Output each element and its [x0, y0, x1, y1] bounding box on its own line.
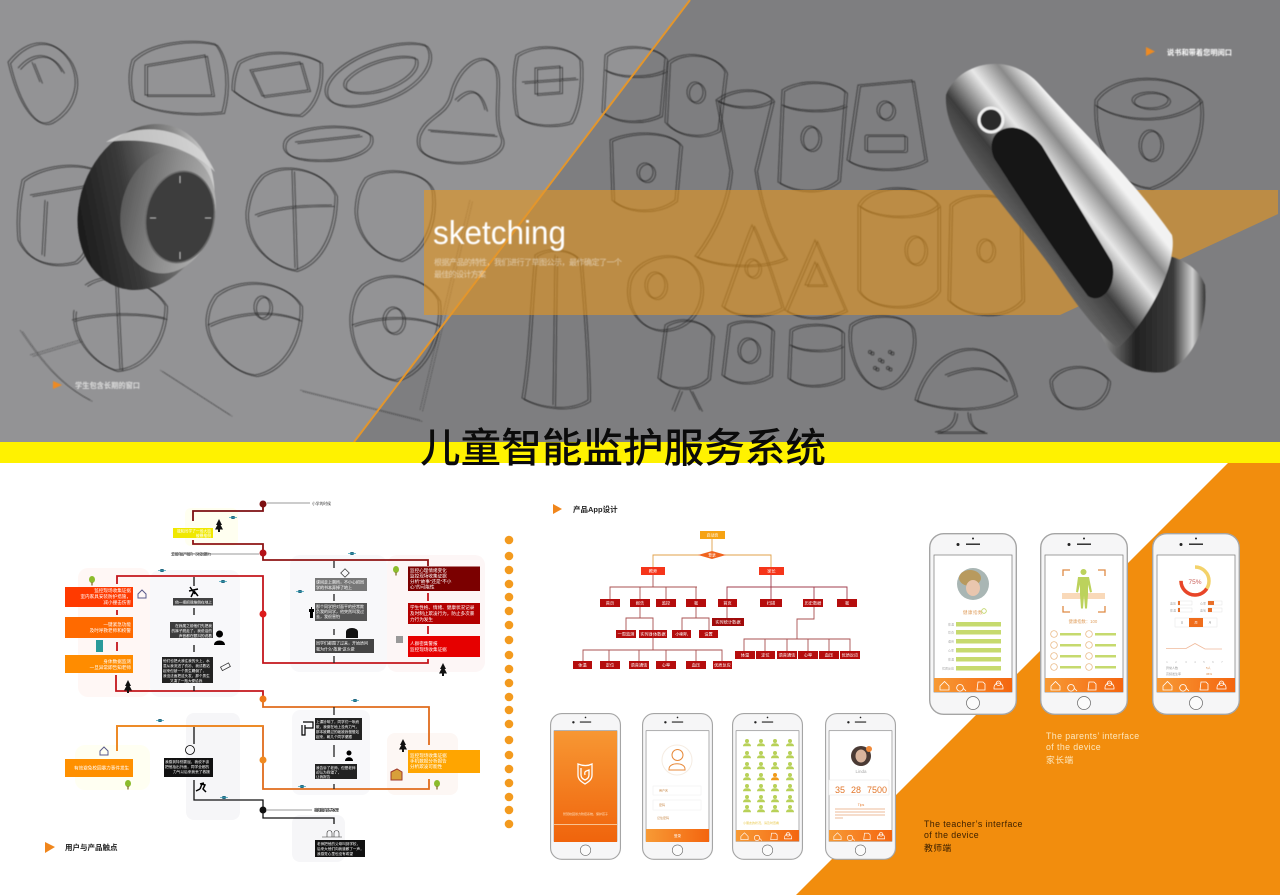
red stage: story boxes middle: 又凑了一瓶大便给我	[170, 678, 203, 683]
peach scan band	[1062, 593, 1105, 599]
login inputs	[653, 786, 701, 810]
child portrait	[957, 568, 989, 600]
hero background left triangle	[0, 0, 690, 442]
black inset strip	[992, 128, 1113, 298]
login diamond: 登录	[708, 552, 716, 558]
teacher branch nodes: 监控	[662, 600, 671, 606]
sketching heading: sketching	[433, 214, 566, 251]
tree connectors	[583, 539, 850, 661]
profile name: Linda	[855, 769, 867, 774]
donut track	[1181, 567, 1209, 595]
orange diagonal line	[354, 0, 690, 442]
tab bar	[1157, 678, 1235, 692]
flow connector lines	[116, 503, 429, 824]
login diamond	[698, 551, 726, 559]
parent branch nodes: 体温	[741, 652, 750, 658]
caption text: 说书和带着您明阅口	[1167, 48, 1232, 57]
notification badge	[866, 746, 872, 752]
summary rows: 5人	[1206, 666, 1211, 670]
parent branch nodes	[712, 599, 860, 659]
red stage: product measures right: 监控现场收集证据	[410, 572, 447, 580]
body figure	[1076, 569, 1092, 608]
section label: app design	[553, 504, 618, 514]
flow icons	[89, 516, 447, 837]
red stage: story boxes right: 去，我很害怕	[316, 613, 340, 619]
red stage: product measures right	[408, 566, 480, 657]
orange stage boxes: 手机数据分析报告	[410, 758, 447, 764]
flow nodes	[260, 500, 266, 814]
splash background	[554, 731, 617, 842]
donut value: 75%	[1188, 579, 1202, 586]
login button text: 登录	[674, 833, 682, 838]
panel: user journey flowchart	[65, 500, 485, 862]
health score: 健康指数：100	[1069, 618, 1098, 625]
red stage: story boxes middle	[162, 598, 213, 683]
parent branch nodes: 心率	[804, 652, 812, 658]
input labels: 用户名	[659, 788, 668, 792]
bar labels: 体温	[948, 656, 954, 662]
product render: chrome wearable	[946, 64, 1205, 372]
teacher branch nodes: 小喇叭	[675, 630, 689, 638]
ring highlight	[106, 129, 215, 172]
orange stage boxes: 我感觉心里也没有希望	[317, 851, 353, 856]
orange stage boxes: 散，我倒在地上没有力气，	[316, 724, 359, 729]
profile avatar	[851, 746, 871, 766]
ring funnel	[109, 142, 227, 282]
tab bar	[736, 830, 799, 841]
lens	[979, 108, 1003, 132]
mini meters: 血压	[1170, 600, 1176, 606]
parent branch nodes: 血压	[825, 652, 833, 658]
red stage: story boxes middle: 声音都在颤抖的说着	[179, 633, 212, 638]
summary rows	[1166, 665, 1212, 676]
segment labels: 周	[1194, 620, 1198, 624]
red stage: story boxes right: 负我的同学，他突然叫我过	[316, 608, 364, 614]
top right caption	[1146, 47, 1232, 57]
phone: parent body scan	[1041, 534, 1127, 714]
mini meters: 体温	[1170, 608, 1176, 612]
parent branch nodes: 实时统计数据	[715, 618, 741, 626]
splash tagline: 智慧校园暴力防控系统，保护孩子	[563, 811, 608, 816]
label text: 产品App设计	[573, 504, 618, 514]
caption: parents interface: The parents’ interface	[1046, 731, 1140, 741]
flow small labels	[171, 501, 339, 812]
red stage: product measures right: 学生性格、情绪、健康状况记录	[410, 604, 475, 611]
parent branch nodes: 我	[845, 600, 850, 606]
tips: Tips	[858, 803, 864, 807]
red stage: story boxes right	[315, 578, 374, 653]
scan brackets	[1063, 570, 1105, 612]
avatar circle	[662, 745, 692, 775]
parent branch nodes: 定位	[761, 652, 770, 658]
bar labels: 心率	[948, 648, 954, 652]
panel: sketching hero	[0, 0, 1280, 442]
divider	[554, 823, 617, 826]
caption: teacher interface: 教师端	[924, 842, 952, 853]
teacher branch nodes: 优质反应	[714, 662, 731, 668]
bar labels: 语音	[948, 638, 954, 644]
parent branch nodes: 历史数据	[805, 600, 821, 606]
ring ticks	[150, 176, 211, 259]
tab bar	[1045, 678, 1123, 692]
role nodes: 家长	[767, 568, 776, 574]
section label: user and touchpoints	[45, 842, 118, 853]
caption: teacher interface	[924, 819, 1023, 853]
orange stage boxes: 那本被踢过的破被我慢慢站	[316, 729, 360, 734]
yellow start box: 被暴推倒	[196, 533, 211, 538]
phone: splash screen	[551, 714, 620, 859]
bottom left caption	[53, 381, 140, 390]
orange stage boxes: 老师把他的父母叫到学校，	[317, 841, 360, 846]
red stage: story boxes right: 同学们都围了过来，开始质问	[316, 640, 368, 646]
avatar face	[856, 750, 866, 762]
pale background panels	[75, 508, 485, 862]
tab bar	[934, 678, 1012, 692]
summary rows: 36%	[1206, 672, 1212, 676]
input labels: 密码	[659, 802, 665, 807]
flow small labels: 我和我的孩子家里	[314, 808, 339, 812]
face	[966, 580, 980, 596]
red stage: product measures left: 室内家具安装防护措施，	[80, 593, 131, 600]
segment labels: 月	[1208, 620, 1212, 624]
axis numbers: 2	[1175, 660, 1177, 664]
phone: student grid	[733, 714, 802, 859]
hero background right	[0, 0, 1280, 442]
yellow start box	[173, 528, 213, 538]
flow small labels: 小学的时候	[312, 501, 331, 506]
ring body	[55, 105, 237, 309]
red stage: story boxes middle: 他们也把大我往我的头上，水	[163, 658, 210, 663]
sketching description: 根据产品的特性，我们进行了草图公示，最作确定了一个	[434, 257, 622, 267]
base cylinder	[1098, 254, 1205, 372]
mini meters: 血氧	[1200, 608, 1206, 612]
orange stage boxes: 上课铃响了，同学们一哄而	[316, 719, 360, 724]
red stage: product measures left: 及时呼救老师和校警	[90, 627, 131, 634]
teacher branch nodes: 血压	[692, 662, 700, 668]
role nodes	[641, 567, 784, 575]
pencil sketches of product concepts	[8, 41, 1203, 434]
role nodes: 教师	[649, 568, 657, 574]
axis numbers	[1166, 660, 1223, 664]
flow small labels: 爱我的庭产我的一次校园暴力	[171, 552, 211, 556]
arrow marker	[53, 381, 62, 389]
teacher branch nodes: 我	[694, 600, 699, 606]
axis numbers: 4	[1194, 660, 1196, 664]
stats card	[829, 780, 889, 795]
caption: parents interface: of the device	[1046, 742, 1101, 752]
teacher branch nodes: 定位	[606, 662, 614, 668]
parent branch nodes: 语音通话	[779, 652, 795, 658]
metric rows	[1051, 631, 1116, 670]
orange stage boxes: 监控现场收集证据	[410, 752, 447, 759]
stat numbers: 7500	[867, 785, 887, 795]
red stage: story boxes middle: 的裤子脱走了，我说话的	[171, 628, 212, 633]
red stage: story boxes middle: 我没法面把这头发，那个男生	[163, 673, 210, 678]
orange translucent band	[424, 190, 1278, 315]
arrow marker	[553, 504, 562, 514]
arrow marker	[45, 842, 55, 853]
orange stage boxes: 把他抬出外面，同学全都的	[165, 764, 210, 769]
orange stage boxes: 我告诉了老师，但是老师	[316, 765, 356, 770]
bar labels: 优质反应	[942, 666, 954, 670]
hair	[959, 570, 981, 586]
orange diagonal background	[796, 463, 1280, 895]
red stage: product measures right: 分析“故事”还是“不小	[410, 578, 452, 585]
red stage: product measures right: 心”的可能性	[410, 584, 435, 590]
mini meters	[1170, 600, 1222, 612]
red stage: product measures left: 身体数据监测	[103, 658, 131, 665]
teacher branch nodes	[573, 599, 732, 669]
yellow start box: 我和同学了一场大街	[177, 528, 211, 534]
caption: teacher interface: The teacher’s interface	[924, 819, 1023, 829]
title: 儿童智能监护服务系统	[420, 415, 826, 474]
grid note: 小朋友的状况，请及时查看	[743, 820, 779, 825]
red stage: story boxes right: 那个同学把对面平的经常欺	[316, 603, 364, 609]
phone: parent analytics	[1153, 534, 1239, 714]
health heading: 健康指数	[963, 609, 983, 616]
product render: round ring device	[55, 105, 237, 309]
status dot	[982, 609, 986, 613]
label text: 用户与产品触点	[65, 842, 118, 852]
sketching description	[434, 257, 622, 279]
summary rows: 异常人数	[1166, 665, 1178, 670]
teacher branch nodes: 首页	[606, 600, 614, 606]
orange stage boxes: 却认为我错了，	[316, 770, 341, 774]
teacher branch nodes: 实时身体数据	[640, 630, 666, 638]
phone: login screen	[643, 714, 712, 859]
red stage: product measures right: 及时制止欺凌行为，防止多次暴	[410, 610, 475, 617]
ring inner hole	[139, 166, 221, 268]
parent branch nodes: 扫描	[767, 600, 775, 606]
orange stage boxes: 让我报告	[316, 774, 331, 779]
chart: app structure tree	[573, 531, 860, 669]
stat numbers	[835, 785, 887, 795]
orange stage boxes: 起来，朝几个同学便跟	[316, 734, 352, 739]
mini meters: 心率	[1200, 600, 1206, 606]
orange stage boxes: 力气以后来我丢了救援	[173, 769, 210, 774]
teacher branch nodes: 体温	[578, 662, 587, 668]
root node: 启动页	[707, 532, 718, 538]
segment labels: 日	[1180, 620, 1184, 624]
stat numbers: 35	[835, 785, 845, 795]
axis numbers: 6	[1212, 660, 1214, 664]
caption text: 学生包含长期的窗口	[75, 381, 140, 390]
axis numbers: 1	[1166, 660, 1168, 664]
red stage: story boxes middle: 在我爬之前他们先把我	[175, 623, 212, 628]
red stage: product measures left: 一旦异常即告知老师	[90, 664, 131, 671]
red stage: story boxes right: 课间走上厕所，不小心把同	[316, 578, 364, 584]
red stage: story boxes right: 学的书本弄掉了地上	[316, 584, 352, 590]
chrome band	[946, 64, 1173, 348]
red stage: story boxes middle: 起来但被一个男生踢倒了，	[163, 668, 206, 673]
red stage: story boxes middle: 混从我流进了衣衫，我试着站	[163, 663, 210, 668]
stat numbers: 28	[851, 785, 861, 795]
input labels: 记住密码	[657, 815, 669, 820]
shield logo	[578, 764, 592, 784]
health bars	[956, 622, 1001, 670]
orange stage boxes: 后来大他们向我道歉了一声，	[317, 846, 364, 851]
caption: parents interface	[1046, 731, 1140, 765]
red stage: product measures right: 监控现场收集证据	[410, 646, 447, 653]
teacher branch nodes: 语音通话	[631, 662, 647, 668]
bar labels: 体温	[948, 622, 954, 626]
red stage: product measures right: 力行为发生	[410, 616, 433, 623]
orange stage boxes	[65, 718, 480, 857]
arrow marker	[1146, 47, 1155, 56]
login button	[646, 829, 709, 842]
segmented control	[1175, 618, 1217, 627]
bar labels	[942, 622, 954, 670]
grid of students	[743, 739, 794, 812]
tips lines	[835, 808, 885, 818]
orange dotted column	[505, 536, 513, 828]
axis numbers: 7	[1221, 660, 1223, 664]
parent branch nodes: 首页	[723, 600, 732, 606]
avatar icon	[669, 750, 685, 770]
root node	[700, 531, 725, 539]
caption: parents interface: 家长端	[1046, 754, 1074, 765]
segment labels	[1180, 620, 1212, 624]
active segment	[1189, 618, 1203, 627]
axis numbers: 5	[1203, 660, 1205, 664]
bar labels: 饮食	[948, 630, 954, 634]
red stage: product measures right: 监控心理情绪变化	[410, 567, 447, 574]
phone: parent health bars	[930, 534, 1016, 714]
caption: teacher interface: of the device	[924, 830, 979, 840]
axis numbers: 3	[1185, 660, 1187, 664]
parent branch nodes: 优质反应	[842, 652, 858, 658]
red stage: story boxes middle: 他一把把我推倒在地上	[175, 600, 212, 604]
tab bar	[829, 830, 892, 841]
teacher branch nodes: 设置	[704, 630, 713, 638]
phone: student profile	[826, 714, 895, 859]
teacher branch nodes: 心率	[662, 662, 670, 668]
teacher branch nodes: 一周监测	[618, 630, 634, 638]
trend line	[1166, 644, 1222, 649]
orange stage boxes: 有效避免校园暴力事件发生	[74, 764, 130, 772]
red stage: story boxes right: 我为什么“故意”这么做	[316, 646, 355, 652]
red stage: product measures left	[65, 587, 133, 673]
orange stage boxes: 我感到特别委屈，我说不该	[165, 759, 210, 764]
red stage: product measures right: 人群密集警报	[410, 640, 438, 647]
teacher branch nodes: 报告	[636, 600, 644, 606]
red stage: product measures left: 一键紧急功能	[103, 621, 131, 628]
red stage: product measures left: 减小撞击伤害	[103, 599, 131, 606]
donut arc red	[1181, 567, 1209, 595]
sketching description: 最佳的设计方案	[434, 269, 486, 279]
summary rows: 高频发生率	[1166, 671, 1181, 676]
orange stage boxes: 分析欺凌可能性	[410, 763, 443, 770]
red stage: product measures left: 监控现场收集证据	[94, 587, 131, 594]
yellow title band	[0, 442, 1280, 463]
input labels	[657, 788, 669, 820]
